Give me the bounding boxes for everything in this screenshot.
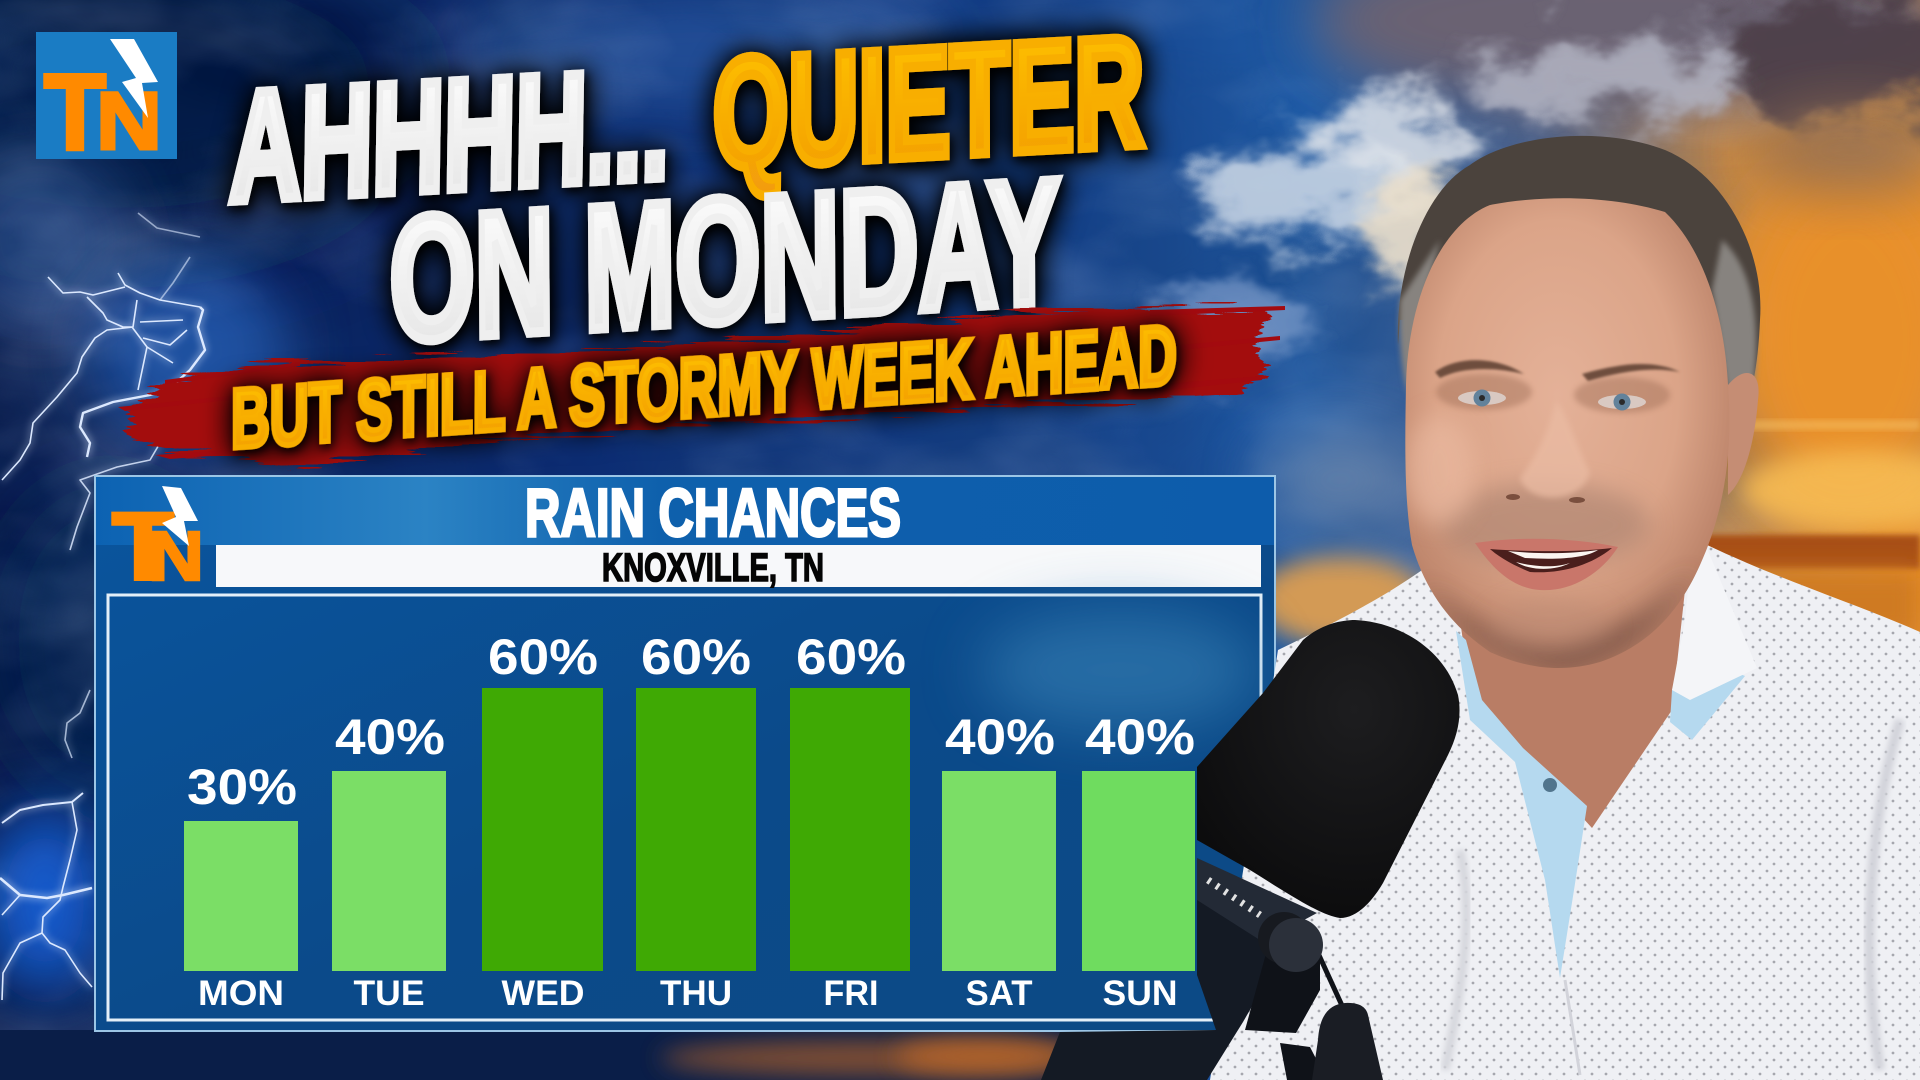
hair [1398,136,1760,425]
panel logo: N [148,517,204,595]
bar: Tuesday 40%: 40% [335,709,445,765]
microphone knob [1258,912,1323,972]
light blue inner collar and placket [1456,631,1745,978]
eyebrows [1435,360,1680,381]
bar chart [184,629,1195,1013]
bar: Friday 60%: FRI [824,974,878,1013]
location bar [216,545,1261,590]
collar [1672,546,1757,700]
bar: Friday 60% [790,629,910,1013]
bar: Wednesday 60%: 60% [488,629,598,685]
headline line: ON MONDAY: ON MONDAY [389,143,1061,379]
right ear [1728,373,1759,495]
bar: Saturday 40% [942,709,1056,1013]
nose [1506,400,1590,503]
bar: Saturday 40%: SAT [966,974,1032,1013]
eyes [1458,390,1646,410]
microphone body [1041,860,1270,1080]
bar: Monday 30% [184,759,298,1013]
headline [228,5,1144,379]
panel logo: T [112,493,174,600]
bar: Wednesday 60%: WED [502,974,584,1013]
bar: Wednesday 60% [482,629,603,1013]
face shading [1405,374,1695,672]
microphone stand [1245,950,1383,1080]
bar: Saturday 40%: 40% [945,709,1055,765]
bar: Friday 60%: 60% [796,629,906,685]
bar: Tuesday 40% [332,709,446,1013]
shirt [1210,544,1920,1080]
neck [1460,590,1685,828]
bar: Sunday 40%: 40% [1085,709,1195,765]
bar: Monday 30%: 30% [187,759,297,815]
shirt button [1543,778,1557,792]
bar: Thursday 60% [636,629,756,1013]
microphone band [1197,858,1317,942]
bar: Thursday 60%: 60% [641,629,751,685]
panel logo [112,486,204,600]
bar: Tuesday 40%: TUE [354,974,424,1013]
red brush stroke banner [118,306,1285,468]
panel heading: RAIN CHANCES [525,475,901,551]
location bar: KNOXVILLE, TN [602,546,824,590]
subheadline: BUT STILL A STORMY WEEK AHEAD [231,307,1177,466]
TN logo top left [36,32,177,172]
bar: Sunday 40% [1082,709,1195,1013]
TN logo top left: T [44,51,106,172]
microphone windscreen [1197,620,1460,918]
panel: rain chances [95,475,1275,1031]
bar: Sunday 40%: SUN [1102,974,1178,1013]
panel header band [96,477,1274,545]
bar: Thursday 60%: THU [660,974,732,1013]
lightning bolts [0,213,205,1000]
presenter [1041,136,1920,1080]
headline word: AHHHH: AHHHH... [228,37,671,235]
bar: Monday 30%: MON [198,974,284,1013]
TN logo top left: N [96,76,162,167]
chart frame [108,595,1261,1020]
face [1405,198,1729,668]
mouth [1475,539,1618,590]
